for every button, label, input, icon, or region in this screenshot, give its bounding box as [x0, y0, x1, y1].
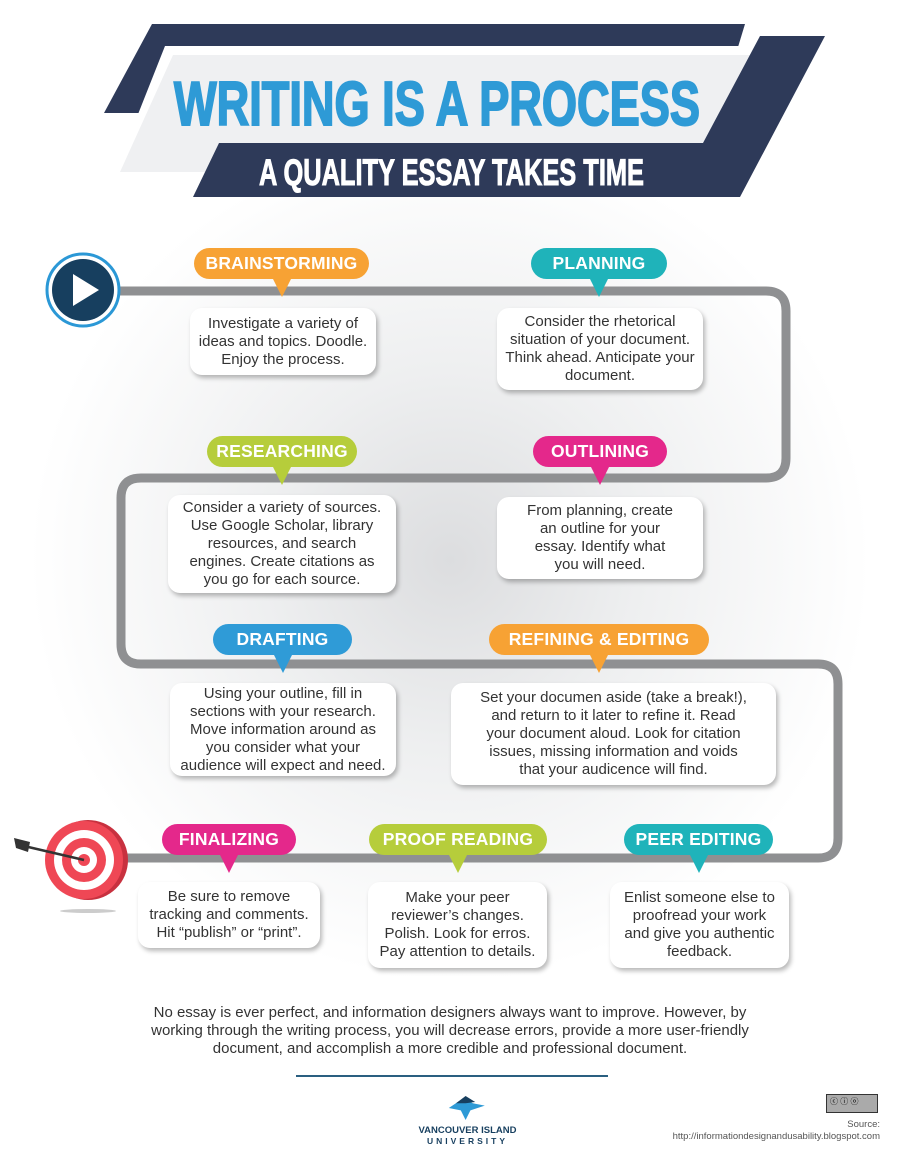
text: Be sure to remove: [168, 888, 290, 905]
footer text: [151, 1004, 749, 1057]
text: Use Google Scholar, library: [191, 517, 373, 534]
text: Pay attention to details.: [380, 943, 535, 960]
text: BRAINSTORMING: [206, 253, 358, 273]
source: Source:: [847, 1119, 880, 1130]
icon: cc license: ⓒ ⓘ ⓞ: [830, 1097, 858, 1106]
logo: Vancouver Island University: UNIVERSITY: [427, 1136, 508, 1146]
text: and give you authentic: [624, 925, 775, 942]
text: you consider what your: [206, 738, 360, 756]
text: PLANNING: [552, 253, 646, 273]
step: peer editing: [610, 824, 794, 974]
text: sections with your research.: [190, 702, 376, 720]
text: RESEARCHING: [216, 441, 348, 461]
text: situation of your document.: [510, 331, 690, 348]
source: [673, 1119, 880, 1142]
text: and return to it later to refine it. Read: [491, 707, 736, 724]
step: brainstorming: [190, 248, 380, 380]
text: ideas and topics. Doodle.: [199, 332, 367, 350]
text: Move information around as: [190, 720, 376, 738]
text: PROOF READING: [383, 829, 533, 849]
text: proofread your work: [633, 907, 766, 924]
text: Investigate a variety of: [208, 314, 358, 332]
text: Consider the rhetorical: [525, 313, 675, 330]
text: Using your outline, fill in: [204, 684, 362, 702]
icon: play button: [46, 252, 120, 328]
icon: cc license: [826, 1094, 878, 1113]
logo: Vancouver Island University: [418, 1096, 516, 1146]
text: that your audicence will find.: [519, 761, 708, 778]
text: your document aloud. Look for citation: [486, 725, 741, 742]
step: planning: [496, 248, 708, 396]
text: PEER EDITING: [636, 829, 761, 849]
text: FINALIZING: [179, 829, 279, 849]
text: From planning, create: [527, 502, 673, 519]
title text: WRITING IS A PROCESS: [174, 70, 700, 139]
text: resources, and search: [208, 535, 356, 552]
step: researching: [168, 436, 400, 598]
text: you will need.: [555, 556, 645, 573]
step: refining & editing: [450, 624, 780, 790]
text: tracking and comments.: [149, 906, 309, 923]
text: document.: [565, 367, 635, 384]
text: REFINING & EDITING: [509, 629, 689, 649]
subtitle: A QUALITY ESSAY TAKES TIME: [259, 152, 644, 193]
text: engines. Create citations as: [189, 553, 375, 570]
footer text: working through the writing process, you will decrease errors, provide a more user-friendly: [151, 1022, 749, 1039]
text: essay. Identify what: [535, 538, 665, 555]
text: Enjoy the process.: [221, 350, 345, 368]
footer text: document, and accomplish a more credible and professional document.: [213, 1040, 687, 1057]
text: Think ahead. Anticipate your: [505, 349, 695, 366]
footer text: No essay is ever perfect, and information designers always want to improve. However, by: [154, 1004, 746, 1021]
text: Consider a variety of sources.: [183, 499, 381, 516]
text: feedback.: [667, 943, 732, 960]
text: Hit “publish” or “print”.: [156, 924, 302, 941]
text: DRAFTING: [236, 629, 328, 649]
text: issues, missing information and voids: [489, 743, 738, 760]
icon: target: [14, 820, 128, 913]
text: an outline for your: [540, 520, 660, 537]
text: Polish. Look for erros.: [385, 925, 530, 942]
title banner: [104, 24, 825, 197]
text: you go for each source.: [204, 571, 360, 588]
text: reviewer’s changes.: [391, 907, 524, 924]
logo: Vancouver Island University: VANCOUVER ISLAND: [418, 1125, 516, 1136]
step: outlining: [496, 436, 708, 584]
text: Enlist someone else to: [624, 889, 775, 906]
step: finalizing: [138, 824, 324, 954]
text: Make your peer: [405, 889, 510, 906]
step: drafting: [170, 624, 400, 782]
text: Set your documen aside (take a break!),: [480, 689, 747, 706]
source: http://informationdesignandusability.blogspot.com: [673, 1131, 880, 1142]
text: OUTLINING: [551, 441, 649, 461]
text: audience will expect and need.: [180, 756, 386, 774]
step: proof reading: [368, 824, 552, 974]
